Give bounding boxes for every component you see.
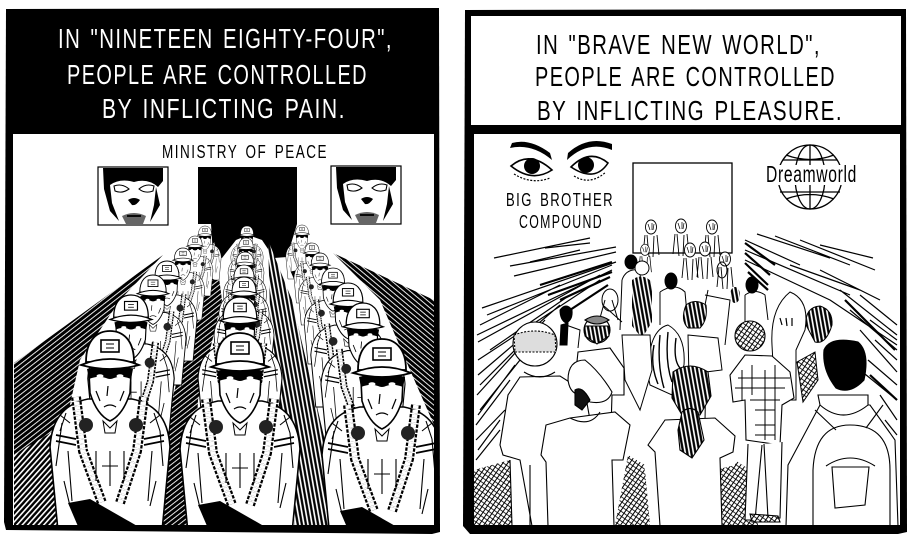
- scene background: [473, 133, 901, 526]
- person: dark hair centre: [622, 335, 652, 410]
- person: long wavy hair: [648, 302, 722, 420]
- person: backwards cap: [541, 360, 630, 526]
- panel: Nineteen Eighty-Four: [4, 8, 442, 539]
- label: Big Brother Compound: BIG BROTHER: [506, 190, 614, 210]
- floor: left radiating lines: [476, 238, 616, 460]
- person: small dark ponytail: [560, 306, 580, 348]
- portrait: left Big Brother screen: [98, 167, 168, 225]
- panel frame: [463, 9, 907, 534]
- scene: Ministry of Peace: [12, 133, 442, 539]
- figures: far crowd in doorway: [639, 219, 733, 289]
- dark doorway: [198, 167, 297, 258]
- aisle: right dark lines: [268, 243, 328, 525]
- person: backpack man: [786, 340, 898, 526]
- panel: Brave New World: [463, 9, 907, 534]
- floor: right hatching: [333, 253, 434, 425]
- icon: watching eyes: [510, 141, 612, 181]
- caption background: [471, 16, 901, 125]
- aisle: left dark lines: [160, 240, 222, 526]
- floor: left hatching: [14, 255, 163, 455]
- figures: middle crowd: [600, 255, 768, 345]
- caption: Nineteen Eighty-Four: PEOPLE ARE CONTROLLED: [67, 59, 368, 90]
- person: plaid shirt: [730, 321, 794, 522]
- person: patterned hair: [576, 316, 625, 412]
- floor: lower crowd hatching: [615, 455, 758, 525]
- label: Big Brother Compound: COMPOUND: [519, 212, 603, 232]
- soldiers: right column: [286, 225, 442, 539]
- doorway: [633, 163, 732, 253]
- person: ponytail woman: [648, 366, 735, 526]
- floor: right radiating lines: [745, 234, 897, 435]
- soldiers: left column: [50, 226, 221, 531]
- label: Big Brother Compound: [507, 193, 612, 228]
- sign: Ministry of Peace: MINISTRY OF PEACE: [162, 142, 328, 162]
- portrait: right Big Brother screen: [331, 166, 401, 224]
- soldiers: centre column: [180, 226, 300, 533]
- caption: Brave New World: [535, 29, 843, 126]
- person: far-right dark hair: [772, 292, 832, 402]
- caption: Nineteen Eighty-Four: IN "NINETEEN EIGHTY-FOUR",: [58, 23, 393, 54]
- scene: crowd heading to Dreamworld: [473, 133, 901, 526]
- person: man with light hair, back view: [500, 322, 590, 526]
- caption: Nineteen Eighty-Four: [58, 23, 393, 124]
- panel frame and black caption background: [4, 8, 440, 534]
- scene background: [12, 133, 435, 526]
- floor: bottom-left cross hatching: [474, 460, 512, 525]
- caption: Nineteen Eighty-Four: BY INFLICTING PAIN.: [102, 93, 346, 124]
- icon: Dreamworld globe: [778, 144, 842, 210]
- label: Dreamworld: Dreamworld: [766, 161, 857, 187]
